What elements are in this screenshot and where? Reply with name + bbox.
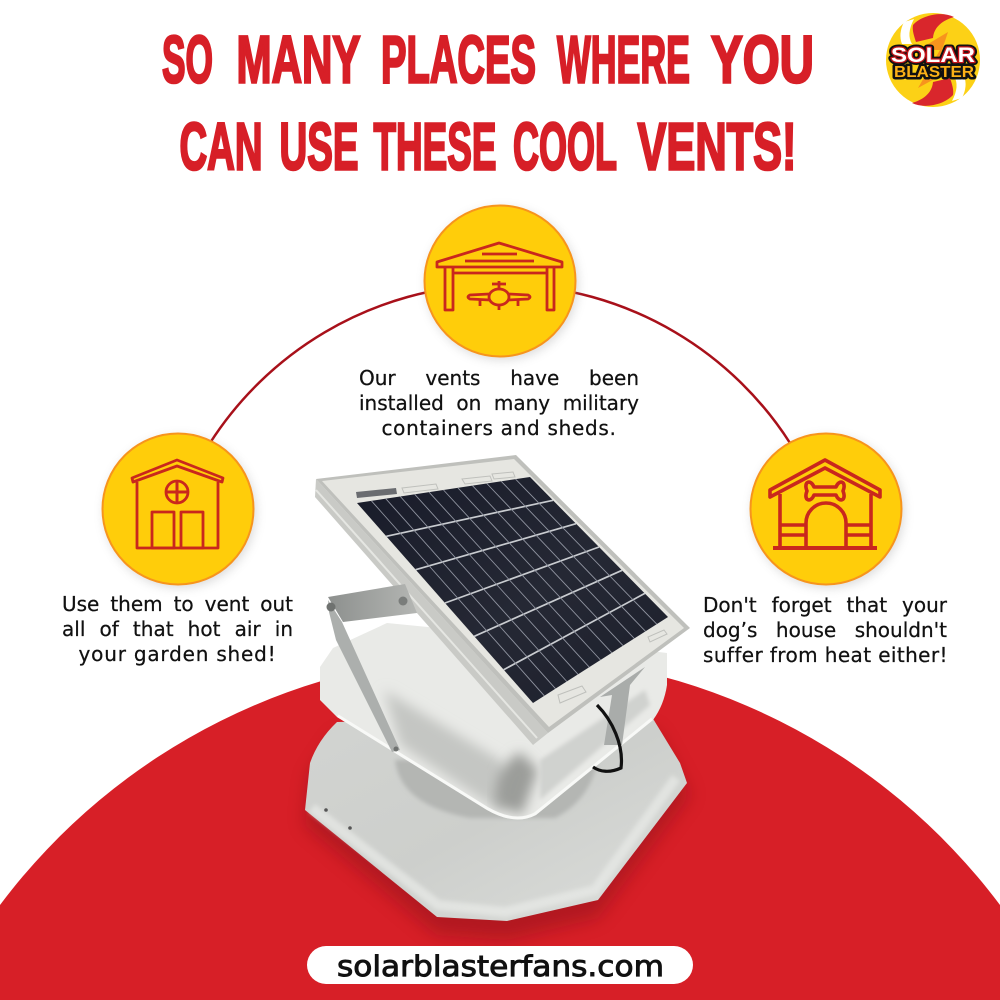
title: MANY bbox=[236, 24, 360, 98]
text: garden shed: all of that hot air in bbox=[62, 617, 293, 641]
icon circle: dog house bbox=[750, 434, 904, 588]
title: USE bbox=[280, 111, 358, 185]
red semicircle background bbox=[0, 655, 1000, 1000]
website pill bbox=[307, 946, 693, 984]
title: SO bbox=[162, 24, 213, 98]
text: dog house: suffer from heat either! bbox=[703, 643, 948, 667]
solar vent product bbox=[305, 455, 690, 940]
title: CAN bbox=[180, 111, 262, 185]
title: YOU bbox=[711, 24, 814, 98]
logo bbox=[886, 13, 980, 107]
connecting arc bbox=[210, 284, 790, 443]
logo: BLASTER bbox=[894, 64, 974, 81]
title: PLACES bbox=[381, 24, 536, 98]
text: military containers: installed on many military bbox=[359, 391, 639, 415]
title bbox=[162, 24, 814, 185]
right bracket and cable bbox=[593, 667, 645, 771]
panel label bbox=[356, 488, 397, 498]
title: WHERE bbox=[557, 24, 690, 98]
text: dog house: Don't forget that your bbox=[703, 593, 947, 617]
text: military containers bbox=[359, 366, 639, 440]
logo: SOLAR bbox=[891, 44, 975, 67]
text: military containers: containers and sheds. bbox=[381, 416, 617, 440]
logo: SOLAR bbox=[891, 44, 975, 67]
flange shadow bbox=[305, 730, 690, 940]
panel frame tabs bbox=[402, 472, 667, 703]
dome under hood bbox=[395, 760, 598, 818]
text: dog house bbox=[703, 593, 948, 667]
logo: SOLAR bbox=[891, 44, 975, 67]
text: garden shed: your garden shed! bbox=[79, 642, 276, 666]
logo: BLASTER bbox=[894, 64, 974, 81]
icon circle: garden shed bbox=[102, 434, 256, 588]
text: garden shed bbox=[62, 592, 293, 666]
hood body bbox=[320, 623, 667, 819]
title: VENTS! bbox=[638, 111, 796, 185]
text: dog house: dog’s house shouldn't bbox=[703, 618, 947, 642]
text: military containers: Our vents have been bbox=[359, 366, 639, 390]
icon circle: hangar bbox=[424, 206, 578, 360]
title: COOL bbox=[513, 111, 617, 185]
panel front frame bbox=[316, 455, 690, 733]
flange bbox=[305, 717, 687, 921]
cell row lines bbox=[386, 500, 645, 670]
solar cells bbox=[357, 477, 668, 703]
cell column lines bbox=[371, 479, 657, 696]
text: garden shed: Use them to vent out bbox=[62, 592, 293, 616]
panel side frame bbox=[315, 479, 548, 745]
left bracket bbox=[326, 584, 417, 752]
title: THESE bbox=[374, 111, 496, 185]
website pill: solarblasterfans.com bbox=[337, 950, 664, 983]
